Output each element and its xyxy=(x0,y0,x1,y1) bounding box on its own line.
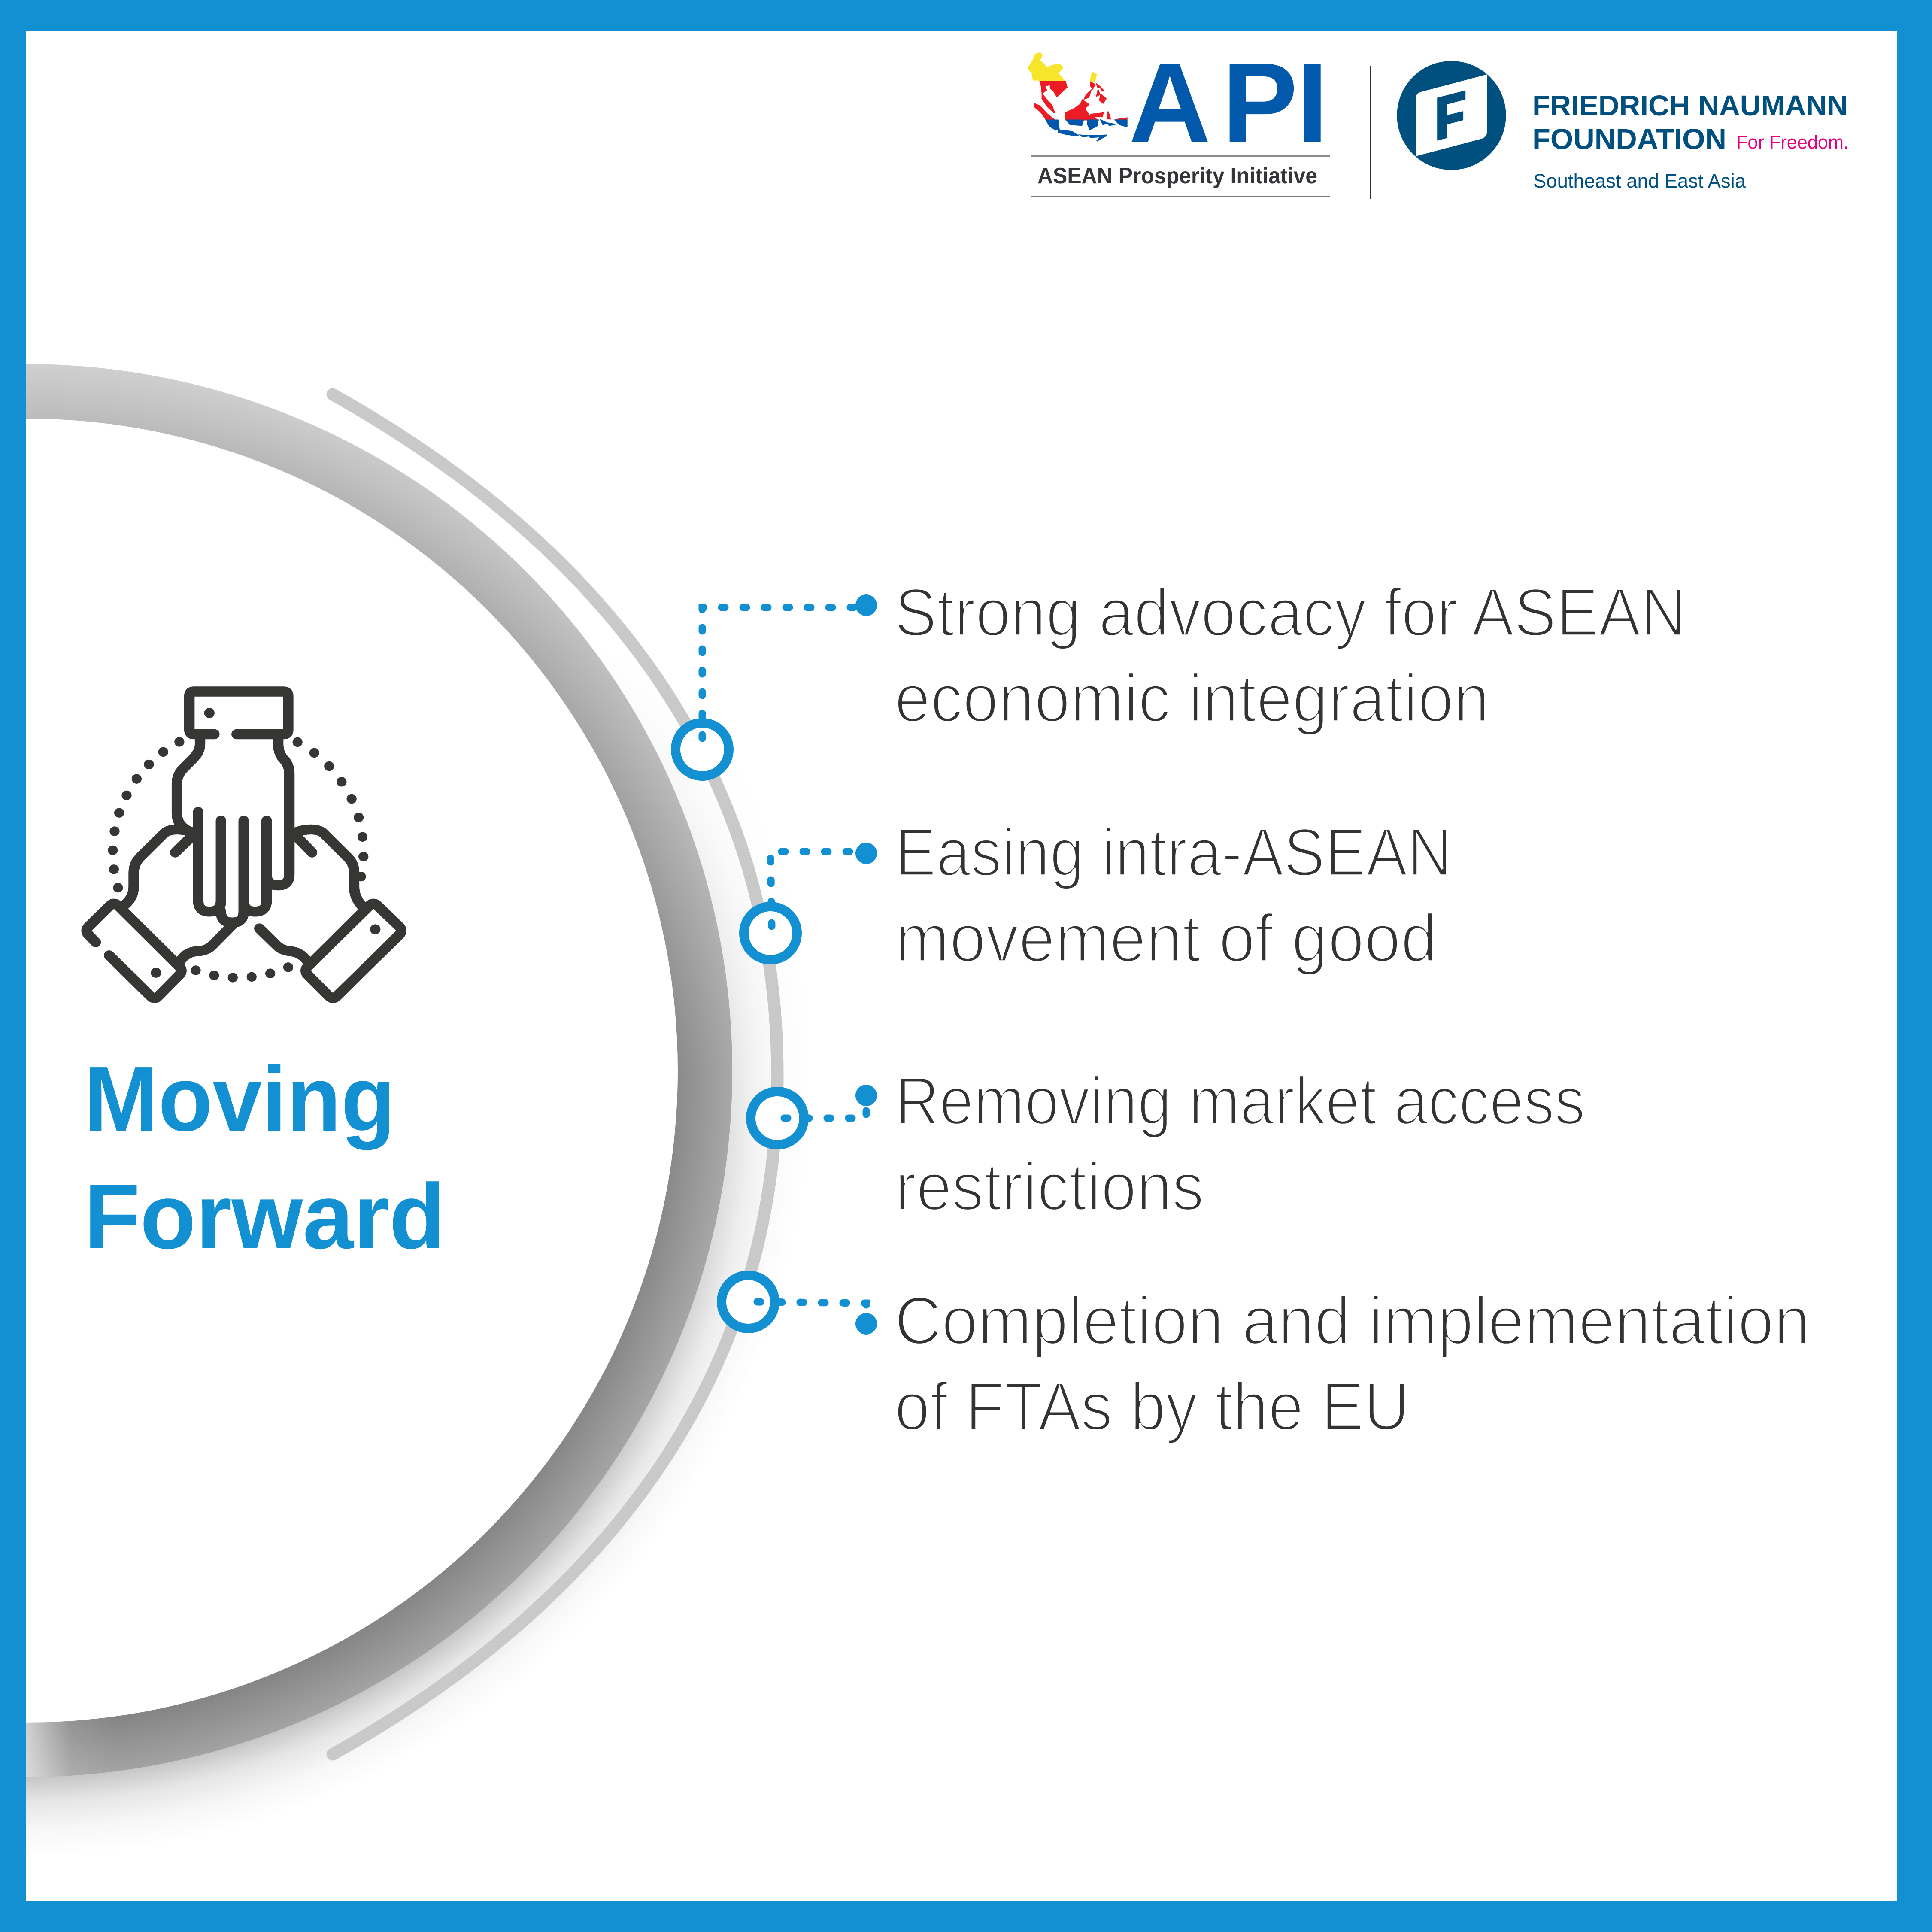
text block 3: restrictions xyxy=(895,1149,1204,1225)
region: Southeast and East Asia xyxy=(1533,170,1746,192)
heading: Moving Forward xyxy=(84,1047,445,1268)
text block 1 xyxy=(895,575,1686,736)
icon: ASEAN map xyxy=(1028,52,1127,141)
thin outer arc xyxy=(333,394,777,1754)
logo: Friedrich Naumann Foundation xyxy=(1397,61,1849,192)
connector 3 xyxy=(751,1085,877,1145)
organisation name line 1: FRIEDRICH NAUMANN xyxy=(1532,90,1848,122)
wordmark API: API xyxy=(1129,39,1328,166)
tagline: For Freedom. xyxy=(1736,132,1849,153)
text block 1: economic integration xyxy=(895,661,1489,736)
text block 4: Completion and implementation xyxy=(895,1283,1810,1359)
text block 2: Easing intra-ASEAN xyxy=(895,815,1452,890)
icon: three joined hands xyxy=(87,692,401,998)
connector 2 xyxy=(744,843,877,960)
text block 2 xyxy=(895,815,1452,976)
logo: ASEAN Prosperity Initiative xyxy=(1028,39,1330,197)
connector 1 xyxy=(676,594,877,776)
logo divider xyxy=(1370,66,1371,199)
rule above caption xyxy=(1031,155,1330,157)
crescent drop shadow xyxy=(26,788,767,1827)
thick grey crescent xyxy=(26,364,732,1777)
rule below caption xyxy=(1031,196,1330,197)
organisation name line 2: FOUNDATION xyxy=(1532,123,1726,155)
text block 2: movement of good xyxy=(895,901,1437,976)
text block 4 xyxy=(895,1283,1810,1444)
connector 4 xyxy=(722,1275,877,1335)
text block 3: Removing market access xyxy=(895,1063,1585,1139)
caption: ASEAN Prosperity Initiative xyxy=(1037,164,1317,188)
icon: FNF emblem xyxy=(1397,61,1506,170)
text block 3 xyxy=(895,1063,1585,1225)
text block 1: Strong advocacy for ASEAN xyxy=(895,575,1686,650)
text block 4: of FTAs by the EU xyxy=(895,1369,1410,1444)
heading: Moving Forward: Moving xyxy=(84,1047,395,1150)
heading: Moving Forward: Forward xyxy=(84,1165,445,1268)
white inner disc xyxy=(0,384,713,1757)
